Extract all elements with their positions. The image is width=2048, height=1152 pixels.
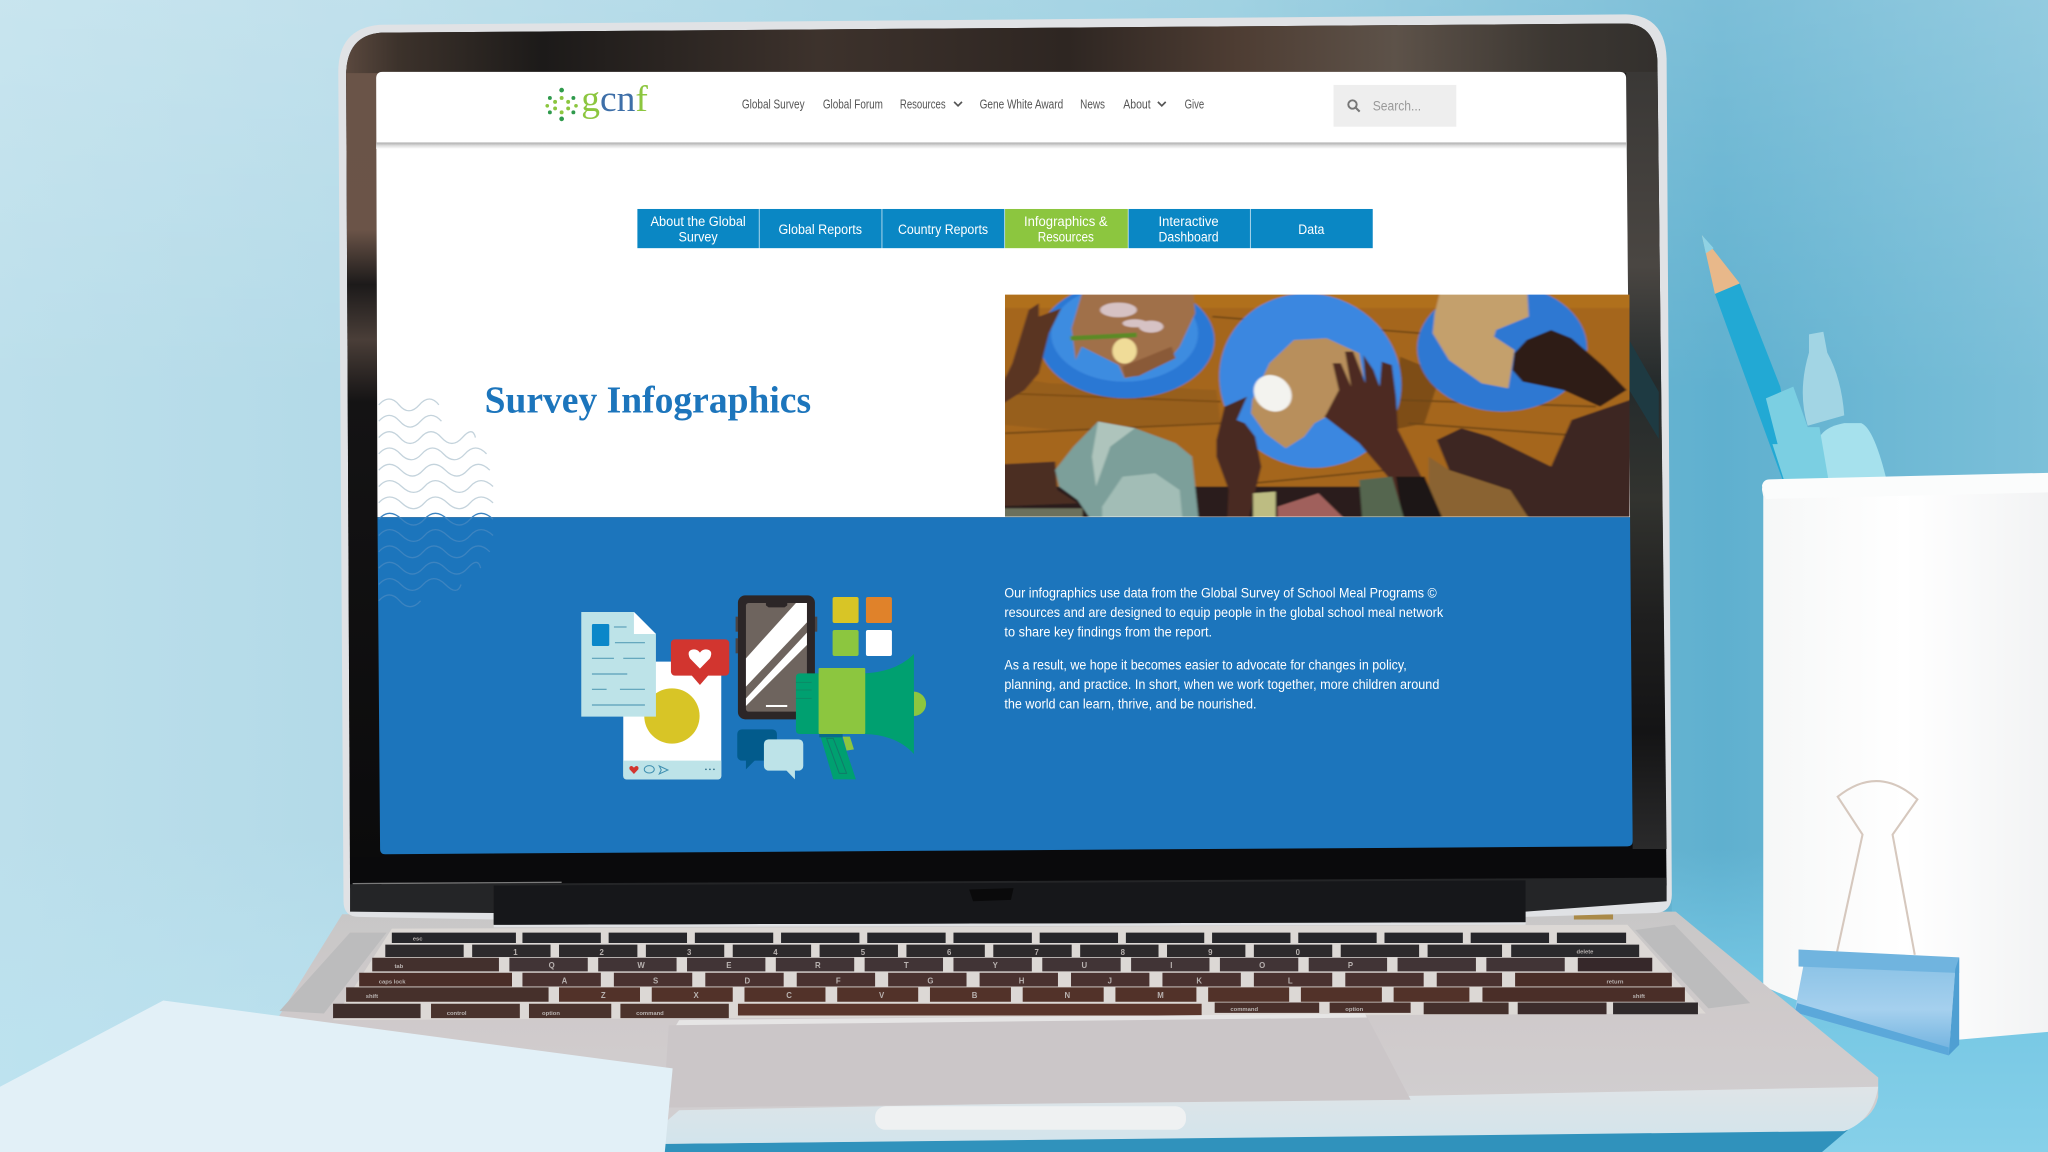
speaker grille: [1635, 925, 1750, 1008]
hands and arms: [1324, 350, 1422, 502]
intro paragraph: to share key findings from the report.: [1004, 625, 1212, 640]
plate 3: [1417, 285, 1587, 412]
icon: marker: [1766, 387, 1829, 481]
tab bar: Infographics &: [1024, 214, 1108, 229]
social post card: [623, 662, 721, 779]
blue content section: [377, 517, 1633, 854]
notebook in foreground: [0, 1000, 673, 1152]
search box: [1334, 85, 1456, 127]
illustration: social media and megaphone: [581, 595, 926, 779]
intro paragraph: resources and are designed to equip people in the global school meal network: [1004, 605, 1443, 620]
laptop deck: [261, 912, 1878, 1152]
key labels: option: [542, 1011, 560, 1017]
key labels: [366, 936, 1645, 1017]
key labels: esc: [413, 936, 423, 942]
navigation menu: Gene White Award: [980, 96, 1063, 111]
tab bar: Survey: [679, 230, 718, 245]
intro paragraph: [1004, 586, 1443, 640]
cloth headwrap: [1054, 421, 1200, 517]
intro paragraph: Our infographics use data from the Global Survey of School Meal Programs ©: [1004, 586, 1437, 601]
tab bar: Interactive: [1159, 214, 1219, 229]
megaphone: [796, 654, 926, 779]
app tile grid: [833, 597, 892, 656]
page background: [376, 72, 1630, 517]
key labels: option: [1345, 1007, 1364, 1013]
title: Survey Infographics: [485, 380, 811, 422]
tab bar: About the Global: [650, 214, 746, 229]
key labels: shift: [1633, 994, 1645, 1000]
key labels: delete: [1576, 949, 1594, 955]
header shadow: [376, 144, 1626, 149]
key labels: ASDFGHJKL: [562, 977, 1293, 986]
website screen: [376, 72, 1649, 854]
laptop lid: [338, 14, 1672, 927]
key labels: command: [636, 1011, 664, 1017]
keyboard: [333, 936, 1698, 1017]
tab bar: Global Reports: [778, 222, 862, 237]
speaker grille: [280, 933, 387, 1014]
heart notification bubble: [671, 639, 729, 685]
key labels: return: [1607, 980, 1624, 986]
pencil cup with pens and binder clip: [1702, 235, 2048, 1055]
second paragraph: [1004, 657, 1439, 712]
icon: highlighter: [1817, 423, 1887, 483]
smartphone: [736, 595, 817, 719]
bottom bezel bar: [350, 878, 1667, 925]
navigation menu: About: [1123, 96, 1151, 111]
laptop: [261, 14, 1878, 1152]
key labels: caps lock: [379, 980, 406, 986]
trackpad: [664, 1014, 1411, 1130]
key labels: QWERTYUIOP: [549, 961, 1353, 970]
key labels: shift: [366, 994, 378, 1000]
plate 2: [1217, 294, 1404, 470]
patterned clothing: [1251, 490, 1278, 517]
pencil holder cup: [1762, 473, 2048, 1040]
navigation menu: Global Survey: [742, 96, 805, 111]
key labels: ZXCVBNM: [601, 991, 1164, 1000]
search box: Search...: [1373, 98, 1421, 113]
navigation menu: [742, 96, 1204, 111]
key labels: control: [447, 1011, 467, 1017]
navigation menu: Resources: [900, 96, 946, 111]
logo dots: [545, 88, 578, 121]
second paragraph: the world can learn, thrive, and be nourished.: [1004, 697, 1256, 712]
key labels: tab: [394, 964, 404, 970]
key labels: command: [1230, 1007, 1258, 1013]
logo wordmark: gcnf: [581, 78, 649, 119]
document: [581, 612, 656, 717]
second paragraph: As a result, we hope it becomes easier to advocate for changes in policy,: [1004, 657, 1407, 672]
navigation menu: News: [1080, 96, 1105, 111]
icon: clear pen cap: [1803, 332, 1844, 426]
icon: pencil: [1702, 235, 1797, 481]
navigation menu: Global Forum: [823, 96, 883, 111]
second paragraph: planning, and practice. In short, when we work together, more children around: [1004, 677, 1439, 692]
plate 1: [1041, 294, 1216, 400]
speech bubbles: [737, 729, 803, 779]
keyboard well: [333, 925, 1706, 1020]
tab bar: Resources: [1038, 230, 1094, 245]
tab bar: Dashboard: [1159, 230, 1219, 245]
tab bar: Data: [1298, 222, 1325, 237]
logo: [545, 78, 649, 121]
navigation menu: Give: [1185, 96, 1204, 111]
key labels: 1234567890: [513, 948, 1301, 957]
wave pattern: [379, 399, 493, 607]
tab bar: [637, 209, 1373, 248]
hero photo: children eating from blue plates: [1005, 294, 1630, 517]
icon: binder clip: [1795, 781, 1959, 1055]
tab bar: Country Reports: [898, 222, 988, 237]
